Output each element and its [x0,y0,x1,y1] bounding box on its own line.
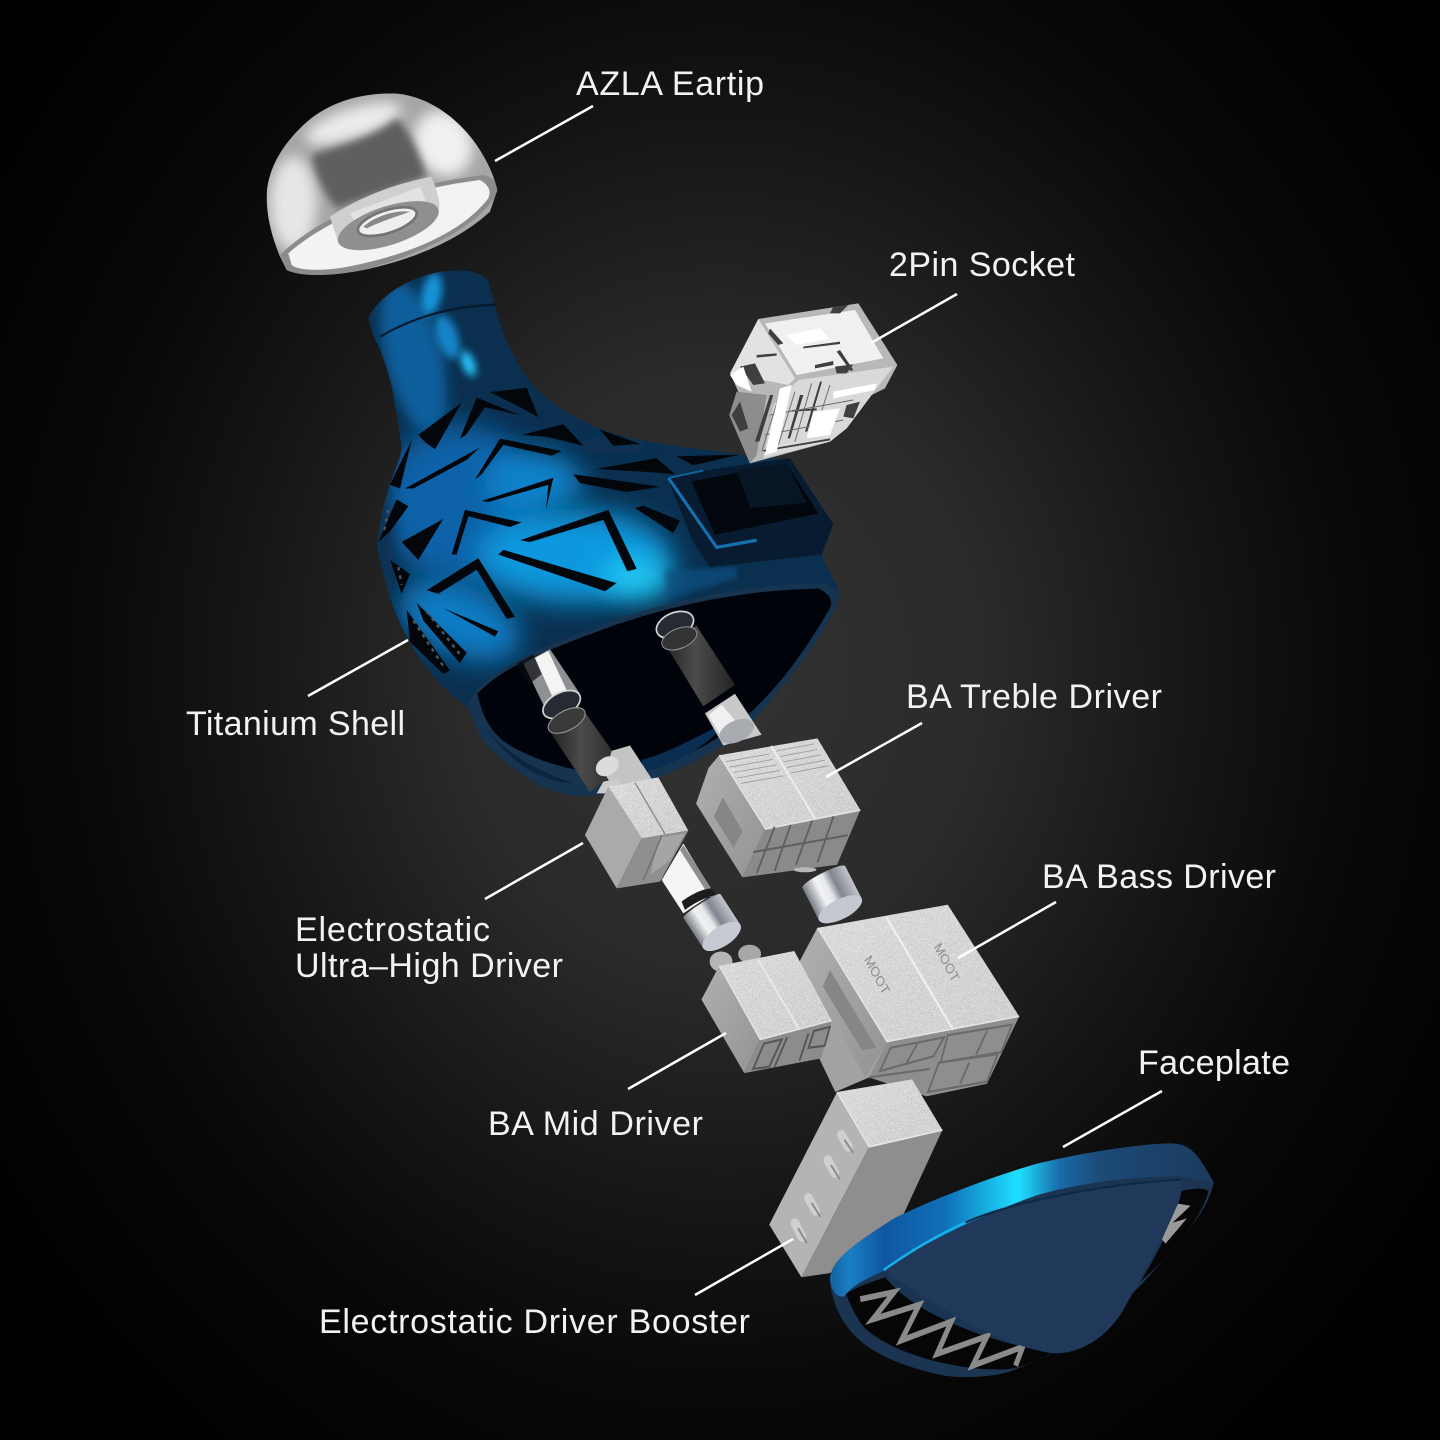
label: BA Mid Driver [488,1033,726,1143]
icon: faceplate [830,1143,1214,1377]
icon: BA bass driver: MOOT [931,940,962,985]
label: Electrostatic Driver Booster [319,1239,793,1341]
cap cylinder [682,892,746,957]
label: AZLA Eartip [495,65,764,161]
label: Titanium Shell [186,640,408,743]
body shading [380,424,540,581]
icon: 2pin socket housing [667,458,833,567]
icon: titanium shell [360,260,847,803]
icon: bass-side cylinder [800,862,866,929]
icon: electrostatic ultra-high driver [585,777,746,957]
icon: BA bass driver [800,905,1019,1096]
icon: BA treble driver [696,738,860,877]
rim lip [467,583,840,796]
label: BA Bass Driver [958,858,1276,958]
faceplate grille [846,1277,1051,1369]
icon: AZLA eartip [263,90,500,277]
shell opening [477,588,831,775]
label: BA Mid Driver: BA Mid Driver [488,1105,703,1143]
label: BA Bass Driver: BA Bass Driver [1042,858,1276,896]
icon: BA mid driver [701,945,832,1073]
icon: electrostatic driver booster [769,1079,942,1277]
perforation detail [383,510,460,669]
faceplate inner panel [883,1181,1182,1353]
icon: BA bass driver: MOOT [862,953,892,998]
label: BA Treble Driver: BA Treble Driver [906,678,1162,716]
label: BA Treble Driver [826,678,1162,777]
neck shading [372,280,454,434]
shell slits [378,388,740,674]
label: Electrostatic Ultra-High Driver [295,843,583,985]
label: Faceplate: Faceplate [1138,1044,1290,1082]
label: Electrostatic Ultra-High Driver: Electrostatic [295,911,490,949]
label: AZLA Eartip: AZLA Eartip [576,65,764,103]
icon: 2pin socket [729,303,897,463]
mottled reflection under block [665,567,737,596]
lower components [696,738,1214,1377]
label: Electrostatic Ultra-High Driver: Ultra–High Driver [295,947,563,985]
label: Faceplate [1063,1044,1290,1147]
icon: connector tubes [517,606,762,799]
label: 2Pin Socket: 2Pin Socket [889,246,1076,284]
label: 2Pin Socket [871,246,1076,343]
label: Electrostatic Driver Booster: Electrostatic Driver Booster [319,1303,750,1341]
label: Titanium Shell: Titanium Shell [186,705,405,743]
